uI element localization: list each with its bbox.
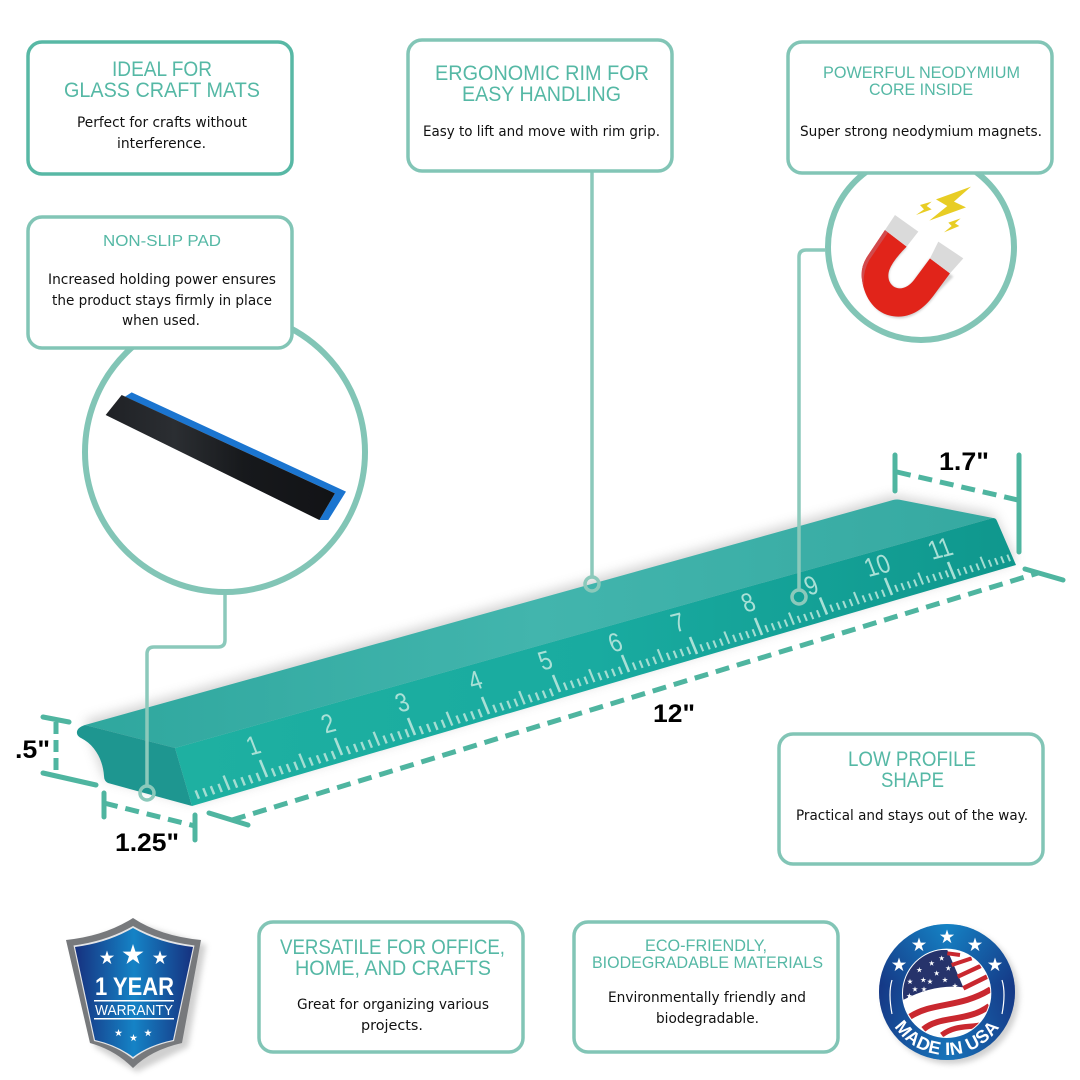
dimension: 1.25 inch width: 1.25": [115, 829, 179, 857]
ruler numbers: 5: [534, 646, 557, 677]
ruler front face: [175, 518, 1016, 806]
ruler end face: [77, 725, 192, 806]
panel: eco-friendly: [574, 922, 838, 1052]
warranty text: [94, 973, 174, 1020]
panel: ergonomic rim: [408, 40, 672, 171]
ruler numbers: 2: [317, 709, 340, 740]
connector: neodymium core to ruler: [792, 250, 826, 604]
dimension: 1.7 inch width: 1.7": [939, 448, 989, 476]
dimension: .5 inch height: [15, 717, 96, 785]
heading: LOW PROFILE: [848, 748, 976, 771]
heading: BIODEGRADABLE MATERIALS: [592, 953, 823, 972]
ruler top face: [85, 500, 993, 748]
ruler numbers: 11: [924, 533, 957, 566]
body text: [77, 115, 247, 152]
heading: [592, 936, 823, 972]
badge: made in USA: [879, 924, 1022, 1066]
ruler numbers: [242, 533, 957, 762]
heading: [64, 58, 260, 102]
body text: Great for organizing various: [297, 997, 489, 1013]
ruler product: [77, 496, 1016, 806]
ruler numbers: 6: [604, 628, 627, 659]
panel: low profile shape: [779, 734, 1043, 864]
heading: HOME, AND CRAFTS: [295, 957, 491, 980]
circle: magnet detail: [828, 154, 1014, 340]
ruler numbers: 9: [800, 571, 823, 602]
body text: biodegradable.: [656, 1011, 759, 1027]
heading: GLASS CRAFT MATS: [64, 79, 260, 102]
panel: versatile: [259, 922, 523, 1052]
body text: Practical and stays out of the way.: [796, 808, 1028, 824]
ruler tick marks: [196, 555, 1010, 799]
heading: EASY HANDLING: [462, 83, 621, 106]
heading: [280, 936, 505, 980]
body text: Increased holding power ensures: [48, 272, 276, 288]
icon: US flag: [900, 949, 991, 1038]
body text: [297, 997, 489, 1034]
heading: [435, 62, 649, 106]
heading: [848, 748, 976, 792]
ruler numbers: 1: [242, 731, 265, 762]
ruler numbers: 4: [464, 666, 487, 697]
body text: when used.: [122, 313, 200, 329]
body text: interference.: [117, 136, 206, 152]
ruler numbers: 10: [860, 550, 895, 583]
heading: CORE INSIDE: [869, 80, 973, 99]
heading: IDEAL FOR: [112, 58, 212, 81]
body text: Super strong neodymium magnets.: [800, 124, 1042, 140]
dimension: 12 inch length: [209, 569, 1063, 825]
panel: non-slip pad: [28, 217, 292, 348]
dimension: 1.7 inch width: [895, 448, 1019, 552]
panel: neodymium core: [788, 42, 1052, 173]
body text: Perfect for crafts without: [77, 115, 247, 131]
warranty stars: [100, 944, 167, 1041]
body text: projects.: [361, 1018, 423, 1034]
badge: 1 year warranty: [66, 918, 206, 1072]
heading: VERSATILE FOR OFFICE,: [280, 936, 505, 959]
connector: ergonomic rim to ruler: [585, 172, 599, 591]
circle: non-slip pad detail: [85, 312, 365, 592]
heading: NON-SLIP PAD: [103, 233, 221, 250]
warranty text: WARRANTY: [95, 1002, 173, 1019]
dimension: .5 inch height: .5": [15, 736, 50, 764]
heading: [823, 63, 1020, 99]
panel: ideal for glass craft mats: [28, 42, 292, 174]
dimension: 1.25 inch width: [104, 793, 195, 857]
body text: Environmentally friendly and: [608, 990, 806, 1006]
ruler numbers: 7: [667, 608, 690, 639]
body text: the product stays firmly in place: [52, 293, 272, 309]
body text: [48, 272, 276, 329]
badge arc text: MADE IN USA: [894, 1020, 1000, 1055]
ruler numbers: 3: [391, 688, 414, 719]
icon: non-slip pad strip: [106, 392, 346, 520]
connector: non-slip pad to ruler: [140, 595, 225, 800]
heading: ERGONOMIC RIM FOR: [435, 62, 649, 85]
badge stars and side arcs: [890, 930, 1004, 1014]
body text: Easy to lift and move with rim grip.: [423, 124, 660, 140]
heading: SHAPE: [881, 769, 944, 792]
ruler numbers: 8: [737, 588, 760, 619]
body text: [608, 990, 806, 1027]
dimension: 12 inch length: 12": [653, 700, 695, 728]
heading: ECO-FRIENDLY,: [645, 936, 767, 955]
warranty text: 1 YEAR: [95, 973, 174, 1001]
icon: horseshoe magnet with bolts: [862, 187, 971, 318]
heading: POWERFUL NEODYMIUM: [823, 63, 1020, 82]
